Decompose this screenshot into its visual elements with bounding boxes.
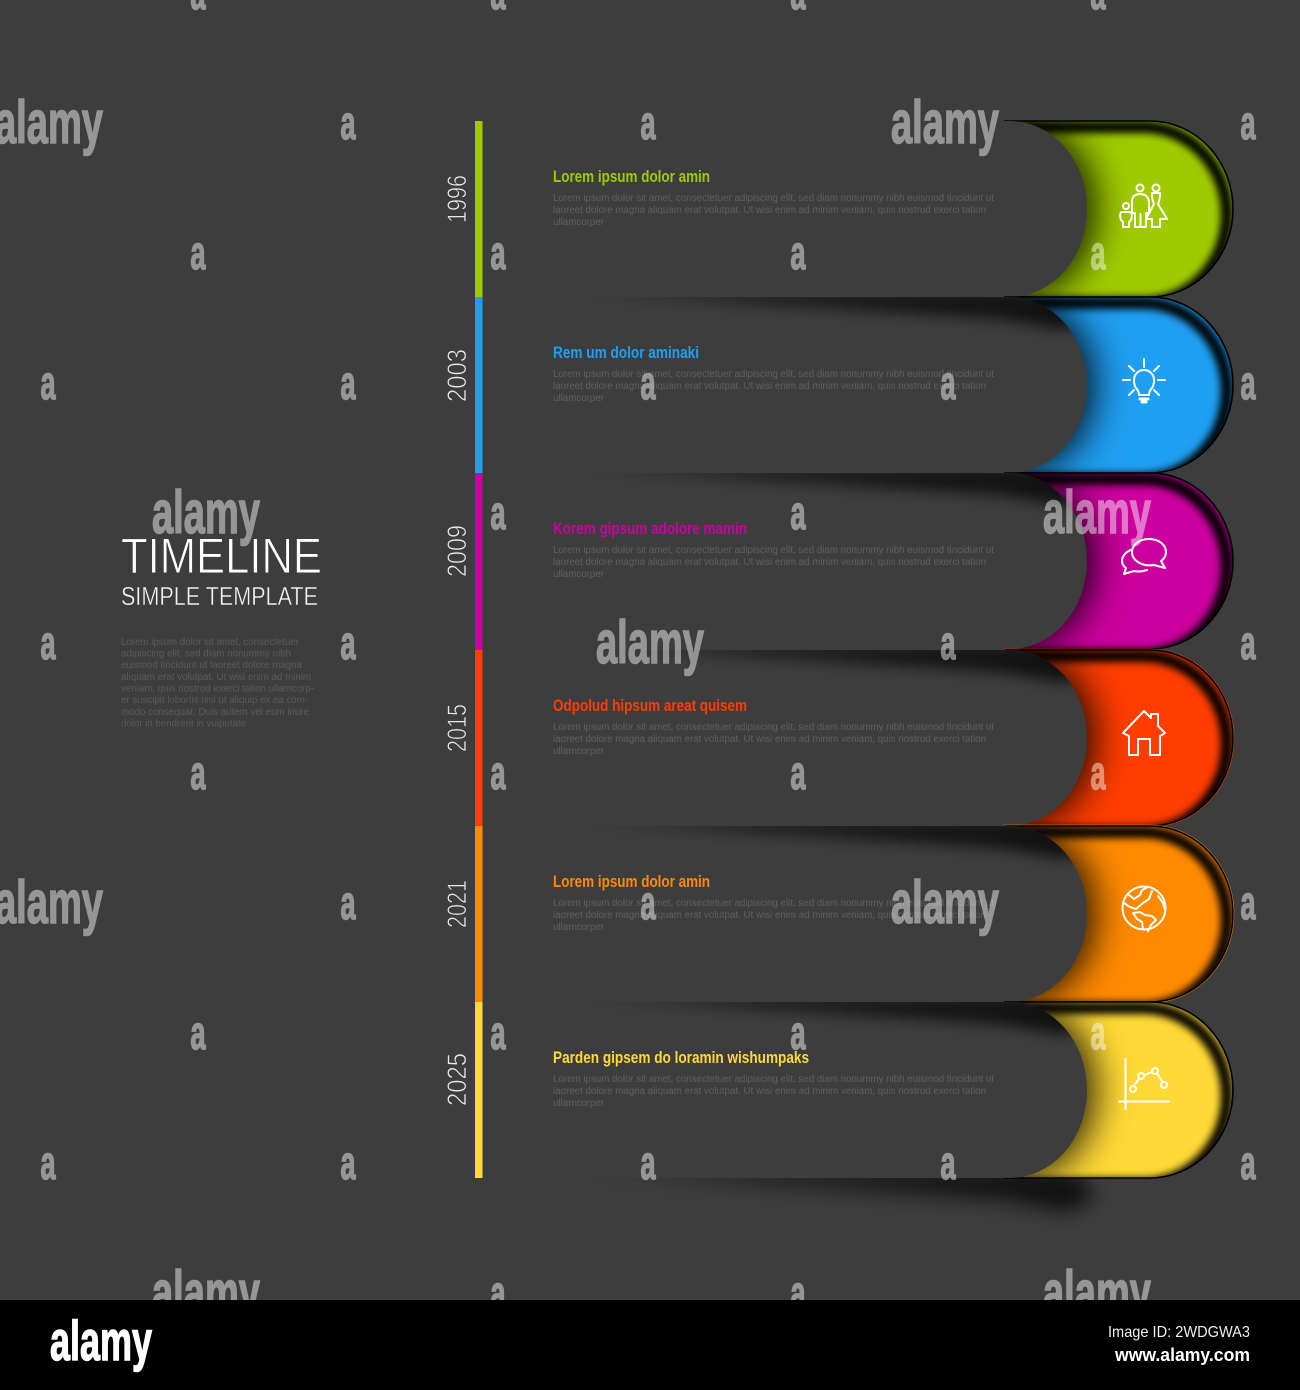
text block: 2015: laoreet dolore magna aliquam erat volutpat. Ut wisi enim ad minim veniam, quis nostrud exerci tation	[553, 734, 986, 745]
watermark layer: a	[490, 486, 506, 539]
icon: light bulb	[1123, 359, 1165, 402]
watermark layer: a	[190, 1006, 206, 1059]
icon: line chart	[1119, 1059, 1169, 1109]
title: SIMPLE TEMPLATE	[121, 581, 318, 611]
watermark layer: a	[1240, 616, 1256, 669]
watermark layer: a	[1090, 226, 1106, 279]
text block: 2025: ullamcorper	[553, 1098, 605, 1109]
watermark layer: a	[940, 616, 956, 669]
image id: Image ID: 2WDGWA3	[1108, 1324, 1250, 1341]
text block: 2015: Odpolud hipsum areat quisem	[553, 697, 747, 715]
text block: 2003: laoreet dolore magna aliquam erat volutpat. Ut wisi enim ad minim veniam, quis nostrud exerci tation	[553, 381, 986, 392]
watermark layer: a	[190, 226, 206, 279]
watermark layer: a	[1090, 1006, 1106, 1059]
row shape: red 2015	[1004, 648, 1234, 826]
watermark layer: a	[790, 746, 806, 799]
watermark layer: a	[640, 96, 656, 149]
text block: 2015: Lorem ipsum dolor sit amet, consectetuer adipiscing elit, sed diam nonummy nibh euismod tincidunt ut	[553, 722, 994, 733]
watermark layer: a	[1240, 356, 1256, 409]
watermark layer: alamy	[0, 869, 103, 936]
row shape: yellow 2025	[1004, 1001, 1234, 1179]
watermark layer: a	[340, 96, 356, 149]
watermark layer: alamy	[152, 479, 260, 546]
watermark layer: a	[190, 746, 206, 799]
drop shadows under rows	[677, 297, 1097, 1218]
watermark layer: a	[1240, 876, 1256, 929]
text block: 2021: Lorem ipsum dolor sit amet, consectetuer adipiscing elit, sed diam nonummy nibh euismod tincidunt ut	[553, 898, 994, 909]
watermark layer: a	[340, 356, 356, 409]
intro paragraph: veniam, quis nostrud exerci tation ullamcorp-	[121, 684, 314, 694]
text block: 2021: laoreet dolore magna aliquam erat volutpat. Ut wisi enim ad minim veniam, quis nostrud exerci tation	[553, 910, 986, 921]
intro paragraph: euismod tincidunt ut laoreet dolore magna	[121, 660, 302, 671]
watermark layer: a	[340, 1136, 356, 1189]
icon: house	[1123, 711, 1165, 755]
watermark layer: a	[40, 356, 56, 409]
watermark layer: a	[940, 356, 956, 409]
row shape: magenta 2009	[1004, 472, 1234, 650]
watermark layer: a	[490, 226, 506, 279]
watermark layer: a	[40, 616, 56, 669]
watermark layer: a	[790, 1266, 806, 1319]
watermark layer: a	[40, 1136, 56, 1189]
icon: family	[1120, 184, 1167, 227]
watermark layer: alamy	[891, 89, 999, 156]
timeline bar	[475, 121, 482, 1178]
text block: 1996: Lorem ipsum dolor sit amet, consectetuer adipiscing elit, sed diam nonummy nibh euismod tincidunt ut	[553, 193, 994, 204]
watermark layer: a	[490, 746, 506, 799]
footer logo: alamy	[50, 1309, 152, 1372]
text block: 2025: Lorem ipsum dolor sit amet, consectetuer adipiscing elit, sed diam nonummy nibh euismod tincidunt ut	[553, 1074, 994, 1085]
watermark layer: alamy	[596, 609, 704, 676]
year: 2015: 2015	[442, 704, 472, 752]
text block: 2009: Lorem ipsum dolor sit amet, consectetuer adipiscing elit, sed diam nonummy nibh euismod tincidunt ut	[553, 545, 994, 556]
watermark layer: a	[1240, 96, 1256, 149]
watermark layer: a	[640, 1136, 656, 1189]
title: TIMELINE	[121, 528, 322, 584]
text block: 1996: laoreet dolore magna aliquam erat volutpat. Ut wisi enim ad minim veniam, quis nostrud exerci tation	[553, 205, 986, 216]
text block: 2015	[553, 697, 994, 757]
watermark layer: a	[1240, 1136, 1256, 1189]
watermark layer: a	[1090, 746, 1106, 799]
watermark layer: a	[790, 1006, 806, 1059]
text block: 1996	[553, 168, 994, 228]
row shape: orange 2021	[1004, 824, 1234, 1002]
year: 2009: 2009	[442, 525, 472, 577]
intro paragraph: er suscipit lobortis nisl ut aliquip ex ea com-	[121, 695, 308, 706]
text block: 2003: ullamcorper	[553, 393, 605, 404]
intro paragraph: dolor in hendrerit in vulputate	[121, 718, 246, 730]
watermark layer: a	[940, 1136, 956, 1189]
watermark layer: a	[790, 486, 806, 539]
text block: 2021	[553, 873, 994, 933]
text block: 2015: ullamcorper	[553, 746, 605, 757]
title	[121, 528, 322, 611]
text block: 2009: ullamcorper	[553, 569, 605, 580]
icon: chat bubbles	[1122, 539, 1166, 574]
icon: globe	[1122, 886, 1166, 931]
watermark layer: a	[340, 616, 356, 669]
watermark layer: a	[490, 1006, 506, 1059]
intro paragraph: Lorem ipsum dolor sit amet, consectetuer	[121, 637, 300, 648]
website: www.alamy.com	[1114, 1345, 1250, 1365]
year: 2021: 2021	[442, 880, 472, 928]
watermark layer: a	[340, 876, 356, 929]
watermark layer: alamy	[0, 89, 103, 156]
text block: 2003: Lorem ipsum dolor sit amet, consectetuer adipiscing elit, sed diam nonummy nibh euismod tincidunt ut	[553, 369, 994, 380]
watermark layer: a	[640, 356, 656, 409]
row shape: blue 2003	[1004, 296, 1234, 473]
footer bar	[0, 1300, 1300, 1390]
text block: 1996: Lorem ipsum dolor amin	[553, 168, 710, 186]
text block: 2025	[553, 1049, 994, 1109]
text block: 2025: Parden gipsem do loramin wishumpaks	[553, 1049, 809, 1067]
row shape: green 1996	[1004, 120, 1234, 297]
intro paragraph: adipiscing elit, sed diam nonummy nibh	[121, 648, 291, 660]
year: 1996: 1996	[442, 175, 472, 223]
text block: 2003	[553, 344, 994, 404]
watermark layer: a	[490, 1266, 506, 1319]
intro paragraph: aliquam erat volutpat. Ut wisi enim ad minim	[121, 672, 311, 683]
text block: 2009	[553, 520, 994, 580]
text block: 2021: ullamcorper	[553, 922, 605, 933]
intro paragraph	[121, 637, 314, 730]
year: 2025: 2025	[442, 1053, 472, 1106]
intro paragraph: modo consequat. Duis autem vel eum iriure	[121, 707, 309, 718]
text block: 2021: Lorem ipsum dolor amin	[553, 873, 710, 891]
watermark layer: alamy	[152, 1259, 260, 1326]
watermark layer: a	[640, 876, 656, 929]
text block: 1996: ullamcorper	[553, 217, 605, 228]
watermark layer: a	[790, 226, 806, 279]
year: 2003: 2003	[442, 349, 472, 402]
text block: 2009: Korem gipsum adolore mamin	[553, 520, 747, 538]
watermark layer: alamy	[891, 869, 999, 936]
text block: 2009: laoreet dolore magna aliquam erat volutpat. Ut wisi enim ad minim veniam, quis nostrud exerci tation	[553, 557, 986, 568]
text block: 2025: laoreet dolore magna aliquam erat volutpat. Ut wisi enim ad minim veniam, quis nostrud exerci tation	[553, 1086, 986, 1097]
watermark layer: alamy	[1043, 1259, 1151, 1326]
watermark layer: alamy	[1043, 479, 1151, 546]
text block: 2003: Rem um dolor aminaki	[553, 344, 699, 362]
